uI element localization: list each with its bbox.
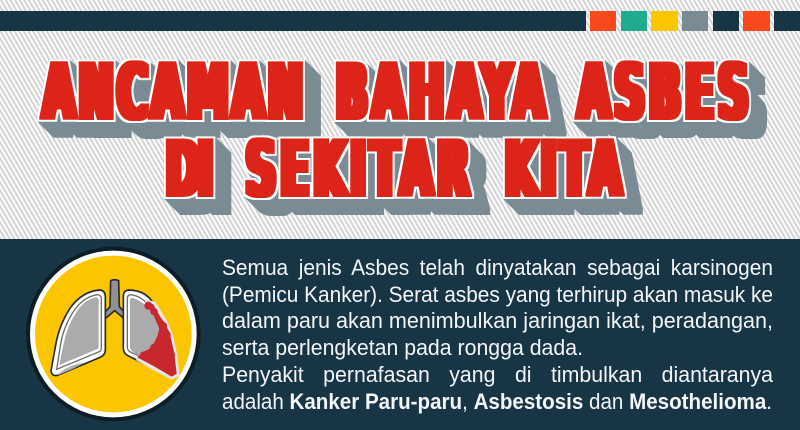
title line 1 xyxy=(43,47,748,138)
title line 1: ASBES xyxy=(578,47,748,138)
title line 1: ANCAMAN xyxy=(43,47,303,138)
title line 2: SEKITAR xyxy=(246,124,469,215)
body text: serta perlengketan pada rongga dada. xyxy=(222,335,583,360)
title line 2: KITA xyxy=(505,124,621,215)
red affected area xyxy=(137,302,177,377)
title line 2 xyxy=(166,124,621,215)
top header bar xyxy=(0,11,800,31)
body text: adalah Kanker Paru-paru, Asbestosis dan Mesothelioma. xyxy=(222,389,772,414)
body text: Penyakit pernafasan yang di timbulkan diantaranya xyxy=(222,362,774,387)
striped background xyxy=(0,0,800,240)
body text: dalam paru akan menimbulkan jaringan ikat, peradangan, xyxy=(222,308,773,333)
white edge of affected area xyxy=(137,301,178,378)
title line 2: DI xyxy=(166,124,213,215)
body text: Semua jenis Asbes telah dinyatakan sebagai karsinogen xyxy=(222,255,773,280)
body text: (Pemicu Kanker). Serat asbes yang terhirup akan masuk ke xyxy=(222,282,773,307)
title line 1: BAHAYA xyxy=(336,47,545,138)
icon: lungs badge xyxy=(26,247,201,421)
body text xyxy=(222,255,774,414)
bottom panel xyxy=(0,239,800,430)
